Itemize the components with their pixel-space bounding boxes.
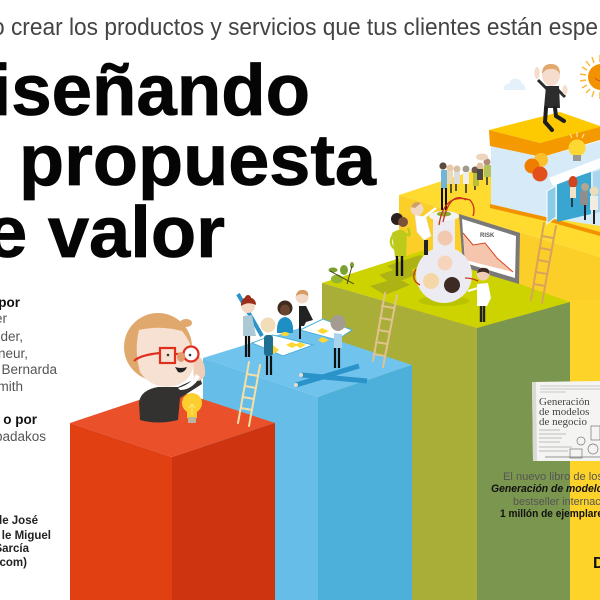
bald person from behind: [260, 318, 276, 375]
icon: cloud: [504, 79, 525, 90]
ladder: blue to green: [373, 293, 397, 367]
side window: [593, 170, 600, 214]
tubes: [414, 198, 478, 285]
steps on green level: [370, 255, 432, 295]
book title: de modelos: [539, 406, 589, 418]
translation credit: [0, 515, 51, 569]
icon: sun: [580, 55, 600, 99]
scientist right: [468, 268, 491, 322]
book title: [539, 396, 590, 428]
pencils: [294, 366, 367, 387]
yellow step block: [399, 162, 600, 600]
red haired woman with pencil: [238, 294, 262, 357]
red step block: [70, 389, 275, 600]
building wall: [491, 141, 600, 226]
roof top: [489, 112, 600, 143]
icon: plant leaves: [328, 262, 354, 284]
icon: light bulb on shop: [568, 132, 586, 161]
book blurb: [540, 386, 600, 392]
flask with people: [414, 198, 478, 306]
shop customers: [568, 176, 598, 224]
blue step block: [203, 328, 412, 600]
book cover: [532, 381, 600, 461]
red glasses: [134, 346, 198, 363]
head hair: [124, 313, 192, 381]
queue of people: [446, 154, 491, 193]
authors credit: der,: [0, 329, 23, 344]
book promotion text: El nuevo libro de los: [503, 471, 600, 483]
designer credit: [0, 412, 46, 444]
grey haired person: [330, 315, 346, 368]
mouth: [175, 367, 187, 372]
hand: [193, 354, 205, 381]
olive step block: [322, 250, 570, 600]
ladder: red to blue: [238, 362, 260, 426]
person with beard: [296, 290, 313, 339]
book details: [539, 430, 572, 451]
shop window: [557, 172, 591, 222]
roof side: [489, 127, 600, 157]
book title: Generación: [539, 396, 590, 408]
balloons: [524, 153, 548, 182]
icon: light bulb: [182, 393, 202, 423]
woman in green: [391, 213, 410, 276]
authors credit: [0, 295, 57, 394]
big man with red glasses: [124, 313, 205, 422]
body: [139, 377, 202, 422]
translation credit: com): [0, 557, 27, 569]
tables with sticky notes: [252, 319, 352, 356]
man in blue at front of the queue: [439, 162, 447, 210]
book title: de negocio: [539, 416, 587, 428]
building on yellow step: [489, 112, 600, 236]
face: [137, 328, 194, 387]
book promotion text: [491, 471, 600, 520]
translation credit: le Miguel: [2, 530, 51, 542]
man on the roof: [534, 64, 568, 130]
risk chart screen: RISK: [480, 233, 495, 239]
scientist left: [410, 202, 436, 255]
designer credit: o por: [3, 412, 38, 427]
title: iseñando: [0, 51, 310, 131]
nose: [177, 352, 185, 362]
ladder: green to yellow: [531, 223, 556, 303]
authors credit: Bernarda: [1, 362, 57, 377]
risk chart screen: [459, 214, 520, 284]
person with dark skin: [277, 300, 293, 336]
title: propuesta: [19, 121, 377, 201]
building base strip: [490, 204, 600, 236]
awning: [549, 158, 600, 186]
white collar beard area: [178, 374, 200, 390]
book doodles: [545, 426, 600, 458]
translation credit: le José: [0, 515, 38, 527]
title: [0, 51, 377, 273]
door: [547, 186, 556, 224]
